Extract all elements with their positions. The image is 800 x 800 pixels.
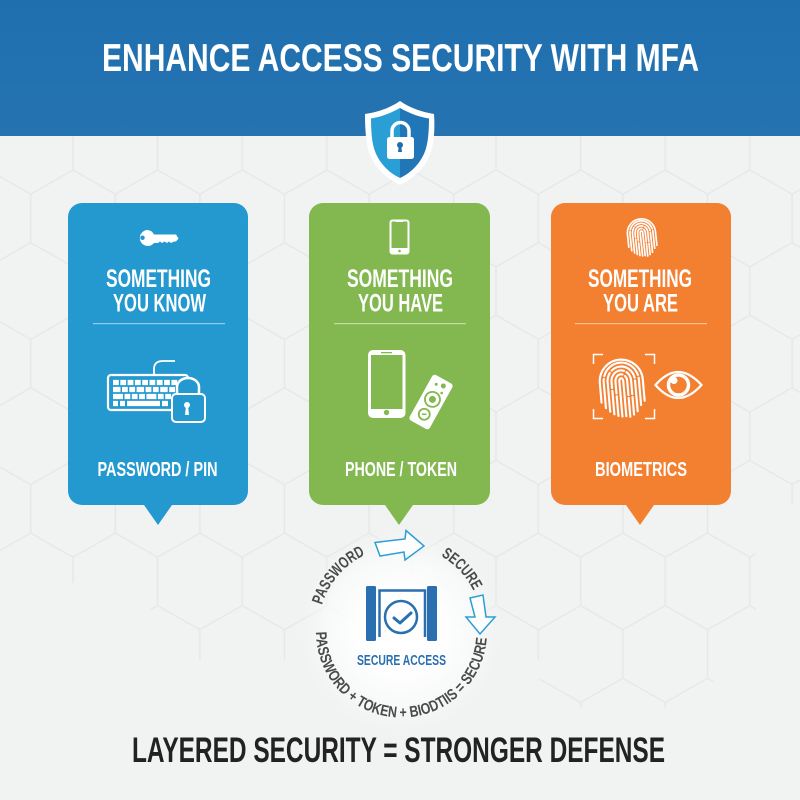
- label: biometrics: BIOMETRICS: [595, 459, 687, 481]
- panel: something you have: [309, 203, 490, 525]
- card shape: orange: [551, 203, 731, 525]
- panel: something you are: [551, 203, 731, 525]
- label: password / pin: PASSWORD / PIN: [98, 459, 218, 481]
- arc label: password: PASSWORD: [312, 546, 364, 604]
- icon: large phone: [368, 350, 406, 418]
- icon: hardware token: [408, 374, 454, 430]
- icon: shield with padlock: [365, 101, 434, 185]
- icon: small phone: [390, 220, 409, 254]
- label: secure access: SECURE ACCESS: [357, 653, 446, 669]
- heading: something you know: [106, 266, 211, 318]
- heading: something you are: YOU ARE: [603, 290, 678, 318]
- heading: something you know: YOU KNOW: [113, 290, 206, 318]
- arc label: formula: PASSWORD + TOKEN + BIODTIIS = SECURE: [316, 632, 487, 718]
- icon: small fingerprint: [626, 217, 658, 258]
- heading: something you have: [347, 266, 453, 318]
- central glow: [293, 524, 509, 740]
- arc label: secure: SECURE: [442, 548, 483, 590]
- heading: something you are: SOMETHING: [588, 266, 692, 293]
- heading: something you have: SOMETHING: [347, 266, 453, 293]
- header band: [0, 0, 800, 136]
- icon: scan brackets and fingerprint: [594, 354, 654, 419]
- heading: something you are: [588, 266, 692, 318]
- secure access cycle diagram: [312, 529, 497, 718]
- arrow: top: [375, 530, 424, 560]
- icon: eye: [656, 372, 702, 398]
- card shape: blue: [68, 203, 248, 525]
- card shape: green: [309, 203, 490, 525]
- heading: something you know: SOMETHING: [106, 266, 211, 293]
- label: phone / token: PHONE / TOKEN: [345, 459, 457, 481]
- icon: secure gate with check: [366, 586, 437, 641]
- icon: keyboard with padlock: [108, 361, 205, 422]
- heading: something you have: YOU HAVE: [358, 290, 443, 318]
- panel: something you know: [68, 203, 248, 525]
- icon: key: [140, 230, 178, 246]
- arrow: right: [466, 595, 495, 634]
